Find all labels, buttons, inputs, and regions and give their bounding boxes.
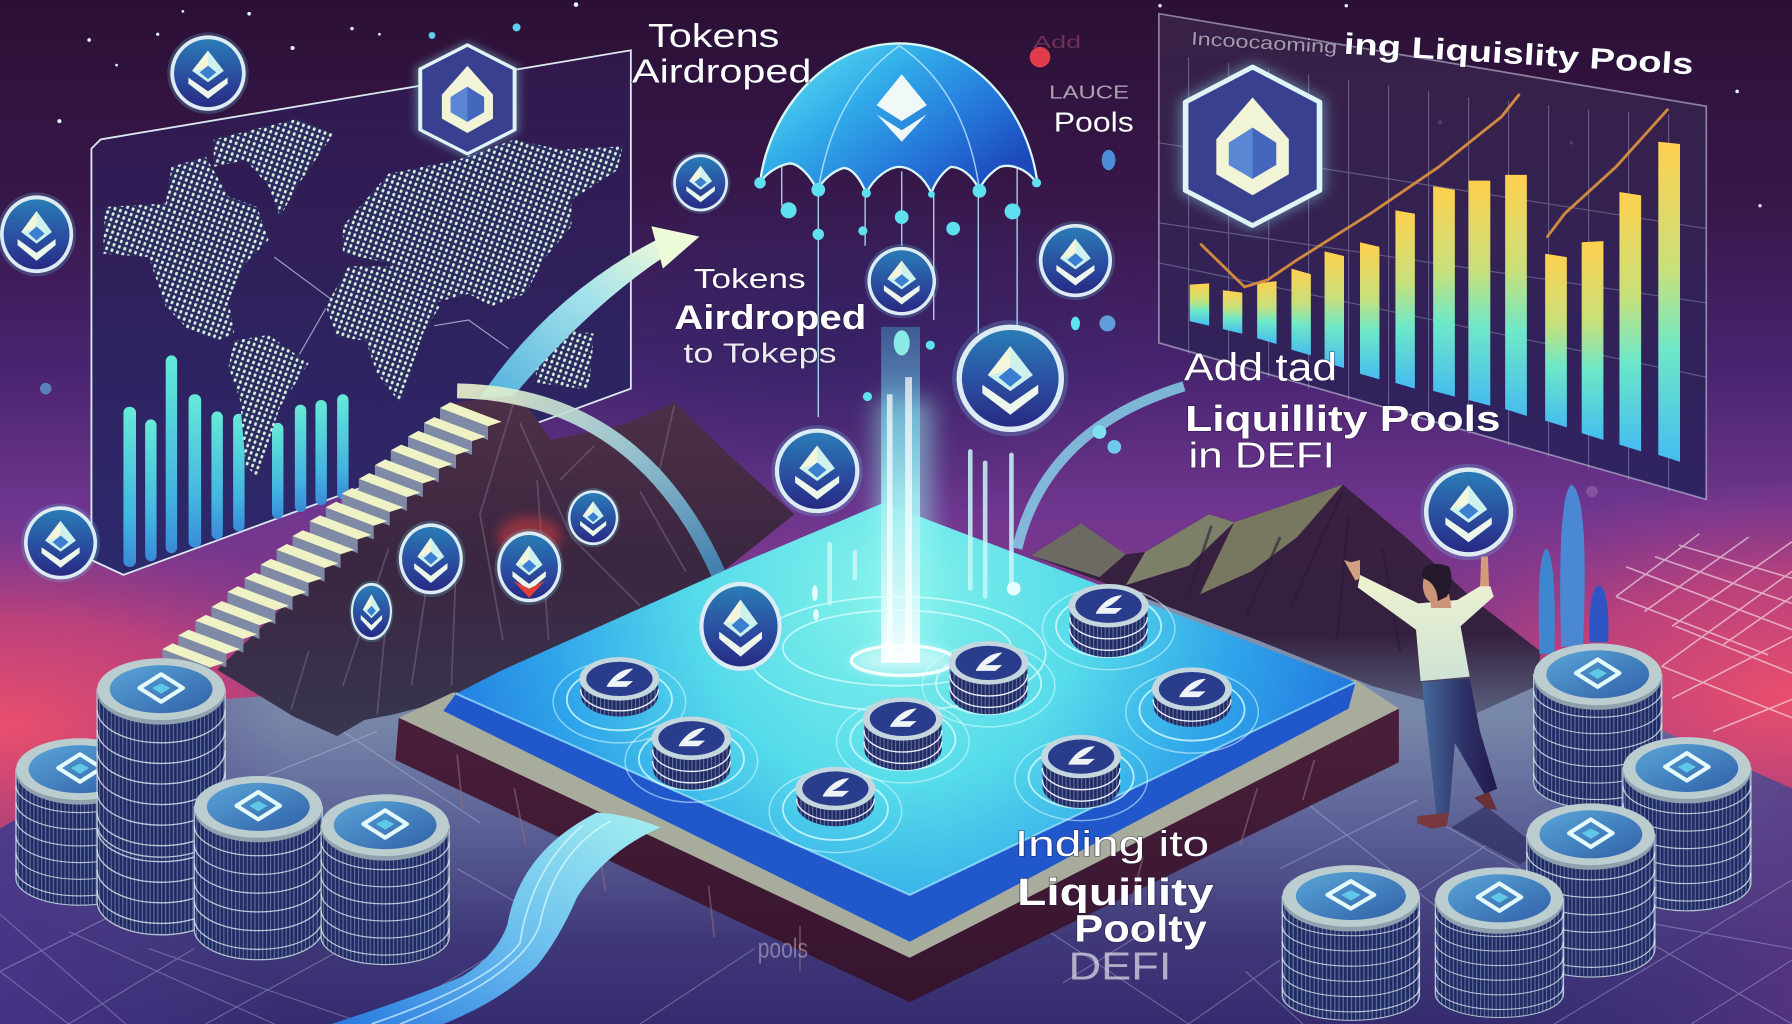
label: inding into liquidity pools defi: DEFI — [1069, 945, 1171, 988]
water beam — [749, 327, 1046, 711]
pool tokens — [553, 584, 1258, 853]
bars — [1190, 142, 1680, 462]
label: tokens airdroped to tokeps: to Tokeps — [683, 337, 837, 368]
umbrella — [754, 43, 1115, 417]
hanging lines and droplets — [782, 166, 1017, 417]
label: inding into liquidity pools defi: Liquiility — [1017, 871, 1214, 913]
icon: hexagon token on chart — [1180, 62, 1325, 230]
legs — [1422, 679, 1497, 816]
label: add lauce pools: LAUCE — [1049, 81, 1129, 102]
label: tokens airdroped top — [632, 18, 811, 90]
pool rim — [399, 680, 1399, 958]
label: tokens airdroped top: Tokens — [648, 18, 779, 55]
large token on pool — [696, 578, 785, 674]
label: add to liquidity pools in defi: Add tad — [1184, 347, 1337, 390]
icon: hexagon token on map — [416, 42, 519, 157]
label: add lauce pools — [1030, 32, 1134, 137]
chart title: Incoocaoming ing Liquislity Pools — [1190, 19, 1694, 81]
stack H — [1282, 865, 1419, 1020]
stack F — [1623, 737, 1751, 911]
person — [1344, 557, 1543, 864]
pool platform — [395, 503, 1399, 1002]
floating tokens — [0, 32, 1115, 582]
staircase — [162, 402, 502, 681]
pool rock base — [395, 709, 1399, 1002]
left mountain — [217, 394, 794, 736]
stack E — [1534, 643, 1662, 809]
head — [1423, 567, 1448, 603]
label: add to liquidity pools in defi: Liquillity Pools — [1185, 398, 1501, 439]
crystals — [1539, 485, 1608, 654]
right coin stacks — [1282, 643, 1751, 1020]
label: add lauce pools: Add — [1033, 32, 1081, 52]
label: tokens airdroped to tokeps: Airdroped — [674, 299, 866, 337]
arc from stairs to pool — [457, 391, 720, 577]
world map dots — [103, 119, 623, 477]
label: add to liquidity pools in defi: in DEFI — [1189, 434, 1335, 475]
pool water side — [443, 682, 1355, 942]
arrow: rising to airdrop — [480, 226, 699, 398]
arc right of pool — [1017, 386, 1184, 549]
right mountain — [1031, 485, 1541, 714]
stack C — [194, 776, 322, 960]
stack G — [1527, 803, 1655, 977]
label: tokens airdroped to tokeps: Tokens — [694, 263, 806, 294]
label: inding into liquidity pools defi: Inding ito — [1015, 823, 1209, 864]
label: faint pools: pools — [758, 933, 808, 964]
label: tokens airdroped to tokeps — [674, 263, 866, 368]
hands — [1344, 560, 1360, 581]
trend lines — [1201, 95, 1667, 287]
pool water surface — [456, 503, 1355, 895]
stack B — [97, 658, 225, 935]
label: tokens airdroped top: Airdroped — [632, 53, 811, 90]
waterfall — [331, 813, 661, 1024]
torso and arms — [1358, 575, 1494, 681]
stack A — [16, 738, 144, 905]
label: add to liquidity pools in defi — [1184, 347, 1501, 475]
left coin stacks — [16, 658, 449, 965]
label: inding into liquidity pools defi: Poolty — [1074, 908, 1207, 950]
bar chart: left panel — [123, 355, 349, 567]
label: inding into liquidity pools defi — [1015, 823, 1214, 988]
pink grid right — [1616, 534, 1792, 731]
panel: liquidity pools bar chart — [1159, 14, 1706, 499]
mountain tokens — [349, 488, 620, 642]
token held by person — [1420, 464, 1517, 560]
forearm — [1480, 557, 1489, 589]
stack D — [321, 794, 449, 965]
label: add lauce pools: Pools — [1054, 106, 1134, 137]
stack I — [1435, 867, 1563, 1018]
floor with grid — [0, 594, 1792, 1024]
panel: world map and bar chart — [91, 50, 631, 575]
stars — [40, 2, 1762, 497]
